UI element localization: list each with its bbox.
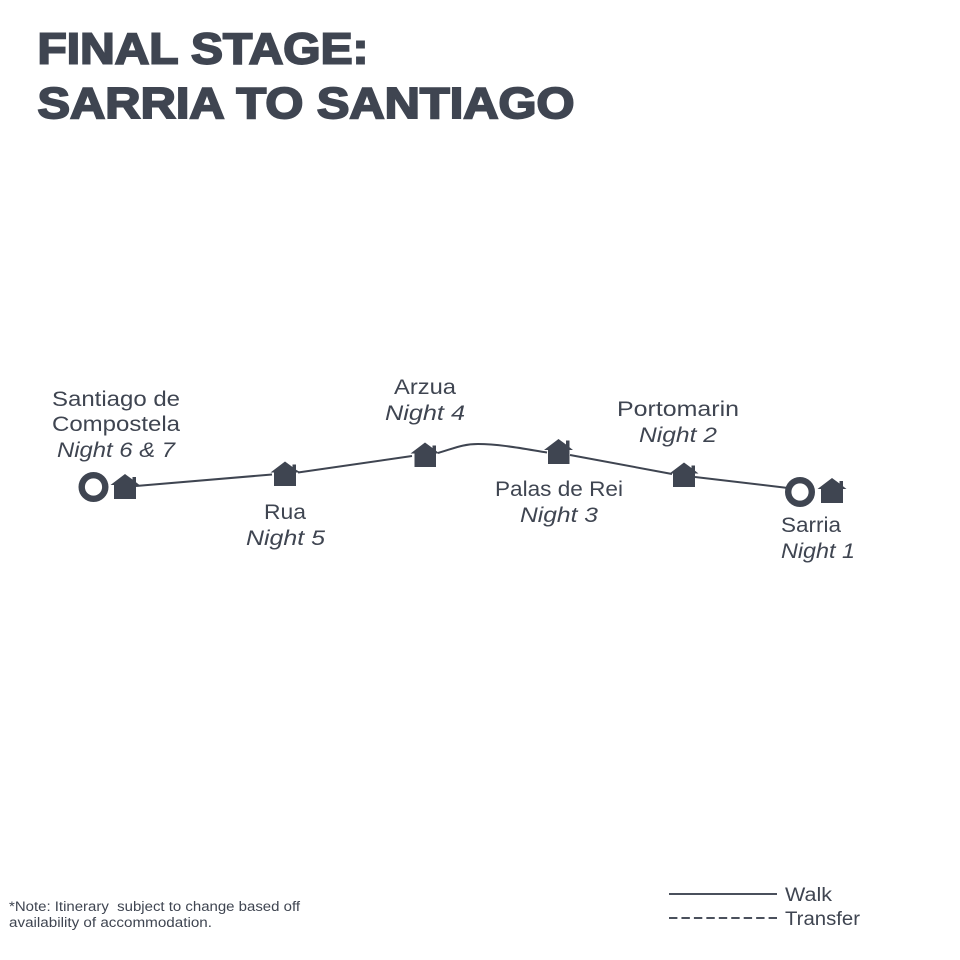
- label: Rua: [246, 500, 326, 550]
- label: Rua: Rua: [264, 500, 306, 524]
- label: Portomarin: Night 2: [639, 423, 717, 447]
- route line: walk: [136, 444, 788, 488]
- icon: house, Palas de Rei: [544, 439, 573, 464]
- label: Santiago de Compostela: Compostela: [52, 412, 180, 436]
- label: Sarria: [781, 513, 855, 563]
- legend: [669, 885, 861, 930]
- label: Palas de Rei: Night 3: [520, 503, 598, 527]
- start marker: Santiago de Compostela: [82, 475, 105, 499]
- label: Palas de Rei: Palas de Rei: [495, 477, 623, 501]
- label: Arzua: [385, 375, 465, 425]
- label: Sarria: Night 1: [781, 539, 855, 563]
- label: Arzua: Night 4: [385, 401, 465, 425]
- icon: house, Arzua: [410, 442, 440, 467]
- label: Portomarin: [617, 397, 739, 447]
- label: Santiago de Compostela: Night 6 & 7: [57, 438, 176, 462]
- label: Sarria: Sarria: [781, 513, 841, 537]
- label: Santiago de Compostela: Santiago de: [52, 387, 180, 411]
- title: FINAL STAGE:: [38, 26, 368, 74]
- footnote: [9, 899, 300, 930]
- end marker: Sarria: [788, 480, 812, 504]
- label: Palas de Rei: [495, 477, 623, 527]
- label: Rua: Night 5: [246, 526, 326, 550]
- title: [38, 26, 574, 128]
- legend: Walk: [785, 885, 833, 906]
- label: Arzua: Arzua: [394, 375, 456, 399]
- footnote: availability of accommodation.: [9, 915, 212, 930]
- icon: house, Santiago de Compostela: [110, 474, 140, 499]
- legend: Transfer: [785, 909, 861, 930]
- label: Portomarin: Portomarin: [617, 397, 739, 421]
- label: Santiago de Compostela: [52, 387, 180, 462]
- icon: house, Sarria: [818, 478, 846, 503]
- icon: house, Portomarin: [670, 462, 698, 487]
- footnote: *Note: Itinerary subject to change based off: [9, 899, 300, 914]
- icon: house, Rua: [270, 462, 301, 486]
- title: SARRIA TO SANTIAGO: [38, 80, 574, 128]
